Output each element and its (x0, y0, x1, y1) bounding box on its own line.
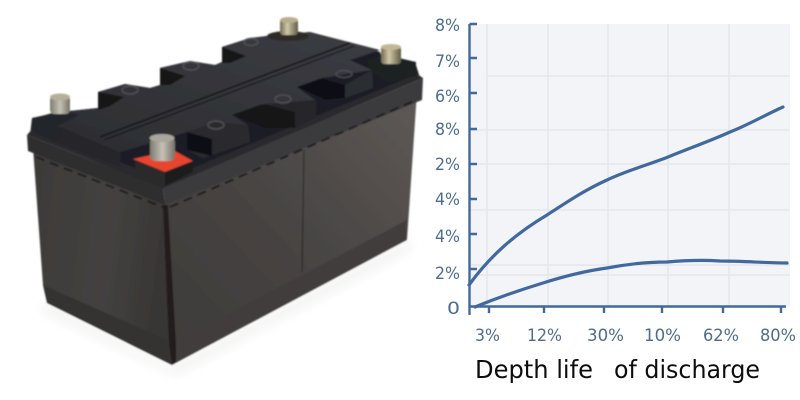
case base ledge left (43, 285, 172, 365)
lid centre ridge (100, 43, 350, 137)
y axis labels: 8% (435, 120, 460, 140)
x axis labels: 10% (644, 326, 681, 346)
y axis labels: 8% (435, 16, 460, 36)
axes (470, 24, 786, 315)
positive terminal red base (133, 150, 193, 172)
x axis labels: 80% (760, 326, 796, 346)
terminal seat left (32, 110, 79, 130)
y axis labels (435, 16, 460, 319)
battery photo (27, 17, 423, 374)
lid front wall left (57, 128, 120, 167)
lid vents (122, 86, 138, 94)
y axis labels: 7% (435, 52, 460, 72)
chart: depth of discharge (435, 16, 796, 384)
lid rim top (27, 74, 423, 188)
y axis labels: 2% (435, 155, 460, 175)
terminal posts (50, 96, 70, 114)
y axis labels: 4% (435, 227, 460, 247)
x axis labels: 62% (703, 326, 739, 346)
terminal seat right (366, 54, 416, 83)
case base ledge right (176, 220, 407, 362)
y axis labels: 4% (435, 190, 460, 210)
lid block walls (187, 122, 250, 158)
y axis labels: 0 (447, 299, 460, 319)
y axis labels: 6% (435, 87, 460, 107)
grid lines (470, 24, 790, 306)
plot background (470, 24, 790, 307)
terminal seat top (267, 31, 309, 41)
lid floor (30, 32, 420, 190)
x axis labels: 30% (587, 326, 624, 346)
battery case left face (33, 148, 172, 365)
lid recesses (98, 92, 124, 110)
upper curve (469, 107, 783, 285)
x axis labels (475, 326, 796, 346)
case seam (302, 150, 304, 272)
x axis title: of discharge (614, 355, 760, 384)
lower curve (475, 260, 787, 307)
x axis labels: 12% (527, 326, 562, 346)
rim shadow notches (36, 100, 416, 208)
x axis title: Depth life (475, 355, 593, 384)
lid top surface (32, 32, 380, 152)
y axis labels: 2% (435, 264, 460, 284)
case corner edge (163, 205, 176, 365)
x axis labels: 3% (475, 326, 500, 346)
lid rim front (27, 135, 165, 205)
battery case right face (165, 92, 417, 365)
ground shadow (42, 242, 412, 374)
x axis title (475, 355, 760, 384)
